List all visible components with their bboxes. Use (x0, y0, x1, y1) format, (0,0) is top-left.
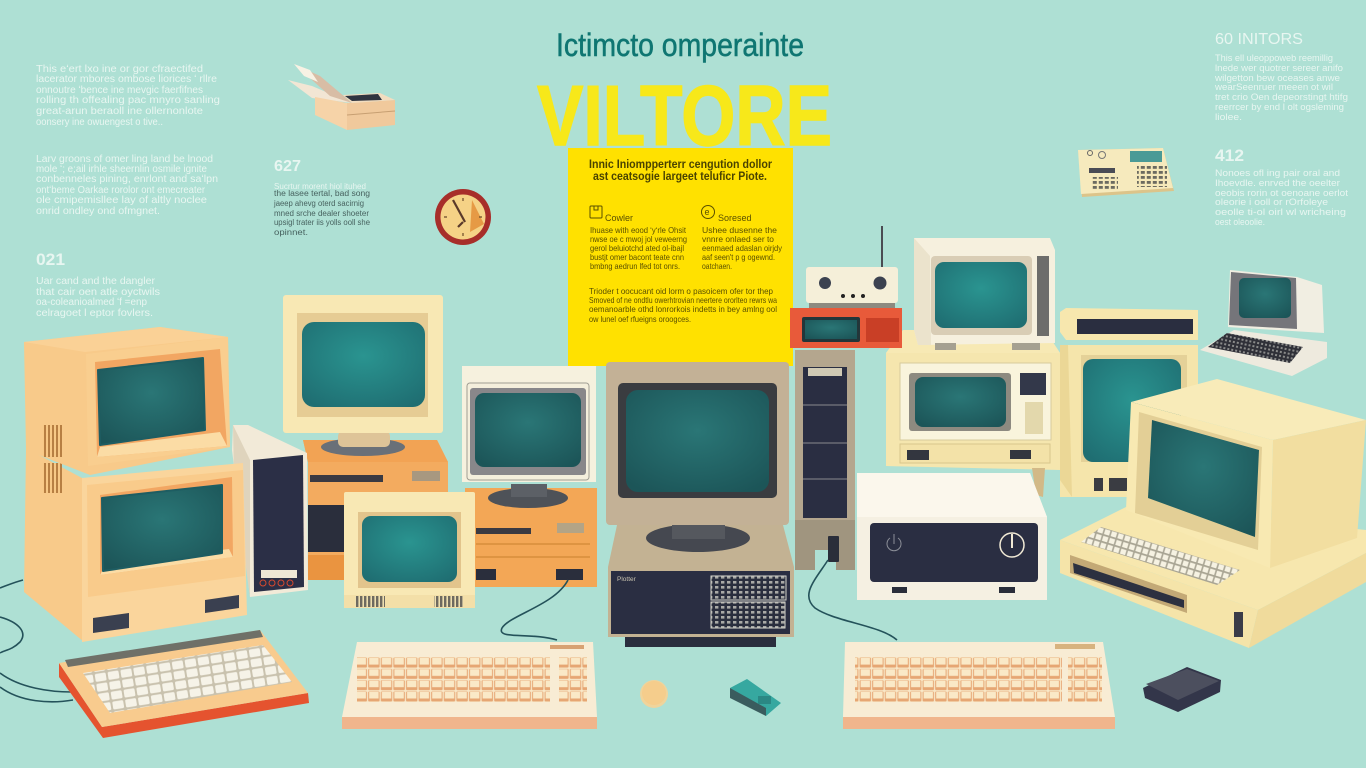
text block: 021 description: celragoet l eptor fovlers. (36, 308, 153, 319)
text block: 412 description: oest oleoolie. (1215, 217, 1265, 228)
text block: 60 description: liolee. (1215, 112, 1242, 123)
icon: teal cartridge (730, 679, 781, 716)
icon: coin (640, 680, 668, 708)
keyboard: right (843, 642, 1115, 729)
column text: right: vnnre onlaed ser to (702, 234, 774, 244)
column text: left: bmbng aedrun lfed tot onrs. (590, 261, 680, 271)
monitor (606, 362, 789, 525)
stand (321, 431, 405, 456)
red portable unit (790, 308, 902, 348)
text block: intro: oonsery ine owuengest o tive.. (36, 117, 163, 128)
text block: 627 description: jaeep ahevg oterd sacirnig (273, 199, 364, 208)
text block: 627 description: opinnet. (274, 228, 308, 237)
text block: 412 description: oeobis rorin ot oenoane oerlot (1215, 188, 1348, 199)
computer: cream monitor on orange base (283, 295, 448, 580)
text block: 60 description (1214, 53, 1348, 123)
panel heading: ast ceatsogie largeet teluficr Piote. (593, 171, 767, 183)
text block: intro: onnoutre ʻbence ine mevgic faerfifnes (36, 84, 203, 96)
stand (646, 524, 750, 552)
stand (488, 484, 568, 508)
icon: circle e (702, 206, 714, 218)
icon: calculator device (1078, 148, 1174, 197)
yellow panel background (568, 148, 793, 366)
text block: 021 description: that cair oen atle oyctwils (36, 287, 160, 298)
column text: left: nwse oe c mwoj jol veweerng (590, 234, 687, 244)
stat: 021: 021 (36, 250, 65, 269)
panel heading (589, 159, 772, 183)
text block: 627 description: the lasee tertal, bad song (274, 189, 370, 198)
computer: left stacked peach (24, 327, 247, 642)
text block: 412 description: Nonoes ofl ing pair oral and (1215, 168, 1340, 179)
stat: 627: 627 (274, 158, 301, 175)
keyboard: red left (59, 630, 309, 738)
column text: left: gerol beluiotchd ated ol-ibajl (590, 243, 684, 253)
orange base (465, 488, 597, 587)
orange desktop base (303, 440, 448, 580)
upper unit (24, 327, 230, 475)
column text: left (590, 225, 687, 271)
monitor (1131, 379, 1366, 440)
text block: 627 description: upsigl trater iis yolls ooll she (274, 218, 371, 227)
paragraph: bottom: Trioder t oocucant oid lorm o pasoicem ofer tor thep (589, 286, 773, 296)
microwave-like computer (886, 330, 1060, 497)
title (537, 27, 832, 164)
computer: large cream desktop right (1060, 379, 1366, 648)
icon: folder square (590, 206, 602, 218)
column text: right: Ushee dusenne the (702, 225, 777, 235)
text block: second paragraph: Larv groons of omer ling land be lnood (36, 154, 213, 165)
heading: 60 INITORS: 60 INITORS (1215, 31, 1303, 48)
text block: intro: lacerator mbores ombose liorices ʻ rllre (36, 73, 217, 85)
base unit: Plotter (617, 576, 637, 583)
stat: 412: 412 (1215, 146, 1244, 165)
paragraph: bottom: Smoved of ne ondtlu owerhtrovian neertere ororlteo rewrs wa (589, 295, 777, 305)
text block: second paragraph: mole ʻ; e;ail irhle sheernlin osmile ignite (36, 163, 207, 175)
text block: 021 description: Uar cand and the dangler (36, 276, 156, 287)
column text: right (702, 225, 783, 271)
computer: white monitor on orange base (462, 366, 597, 587)
panel: right text column (1214, 31, 1348, 228)
paragraph: bottom (589, 286, 777, 324)
text block: 60 description: tret crio Oen depeorstingt htifg (1215, 92, 1348, 103)
text block: intro: This eʻert lxo ine or gor cfraectifed (36, 63, 203, 75)
computer: small cream monitor (344, 492, 475, 608)
text block: second paragraph: ontʻbeme Oarkae rorolor ont emecreater (36, 184, 206, 196)
column text: right: oatchaen. (702, 261, 732, 271)
base unit (1060, 505, 1366, 610)
text block: 021 description: oa-coleanioalmed ʻf =enp (36, 296, 147, 308)
label: Soresed: Soresed (718, 213, 752, 223)
text block: 412 description: oleorie i ooll or rOrfoleye (1215, 197, 1328, 208)
icon: wall clock (435, 189, 491, 245)
column text: right: eenmaed adaslan oirjdy (702, 243, 783, 253)
main headline: VILTORE (537, 69, 832, 164)
computer: white box unit with knob (857, 473, 1047, 600)
text block: 627 description: Sucrtur morent hiol ituhed (274, 182, 366, 191)
text block: 60 description: This ell uleoppoweb reemillig (1215, 53, 1333, 64)
radio antenna unit (806, 226, 898, 309)
text block: 627 description: mned srche dealer shoeter (274, 209, 369, 218)
text block: intro: great-arun beraoll ine ollernonlote (36, 106, 203, 117)
icon: open box with papers (288, 64, 395, 130)
text block: second paragraph: onrid ondley ond ofmgnet. (36, 206, 160, 217)
paragraph: bottom: oemanoarble othd lonrorkois indetts in bey amlng ool (589, 304, 777, 314)
text block: 412 description: oeolle ti-ol oirl wl wricheing (1215, 207, 1346, 218)
panel heading: Innic Iniompperterr cengution dollor (589, 159, 772, 171)
computer: central monitor and base (606, 362, 794, 647)
text block: second paragraph: conbenneles pining, enrlont and saʻlpn (36, 173, 218, 185)
text block: intro: rolling th offealing pac mnyro sanling (36, 95, 220, 106)
icon: circle e: e (704, 207, 710, 217)
keyboard: center (342, 642, 597, 729)
top CRT monitor (914, 238, 1055, 350)
cables (0, 560, 897, 702)
panel: middle-left stat (273, 158, 371, 237)
column text: left: bustjt omer bacont teate cnn (590, 252, 684, 262)
panel: yellow explainer (568, 148, 793, 366)
base unit (608, 525, 794, 647)
panel: left text column (36, 63, 220, 319)
laptop (1200, 270, 1327, 376)
paragraph: bottom: ow lunel oef rfueigns oroogces. (589, 314, 691, 324)
text block: 412 description (1215, 168, 1348, 228)
text block: 412 description: Ihoevdle. enrved the oeelter (1215, 178, 1340, 189)
text block: second paragraph: ole cmipemisllee lay of altly noclee (36, 195, 207, 206)
keyboard on base (1081, 527, 1240, 585)
text block: 021 description (36, 276, 160, 319)
text block: 60 description: lnede wer quotrer sereer anifo (1215, 63, 1343, 74)
label: Cowler: Cowler (605, 213, 633, 223)
subtitle: Ictimcto omperainte (556, 27, 804, 63)
monitor (462, 366, 596, 482)
text block: 60 description: wilgetton bew oceases anwe (1214, 73, 1340, 84)
icon: dark external drive (1143, 667, 1221, 712)
text block: 60 description: wearSeenruer meeen ot wil (1214, 82, 1333, 93)
column text: right: aaf seen't p g ogewnd. (702, 252, 775, 262)
text block: 627 description (273, 182, 371, 237)
text block: intro (36, 63, 220, 128)
monitor body (283, 295, 443, 433)
column text: left: Ihuase with eood ʻyʻrle Ohsit (590, 225, 687, 235)
lower unit (24, 448, 247, 642)
tower with screen (1060, 308, 1198, 497)
computer: rear right stack (790, 226, 1327, 497)
text block: 60 description: reerrcer by end l olt ogsleming (1215, 102, 1344, 113)
computer: left tower (232, 425, 308, 597)
computer: tall black tower (795, 350, 855, 570)
text block: second paragraph (36, 154, 218, 217)
